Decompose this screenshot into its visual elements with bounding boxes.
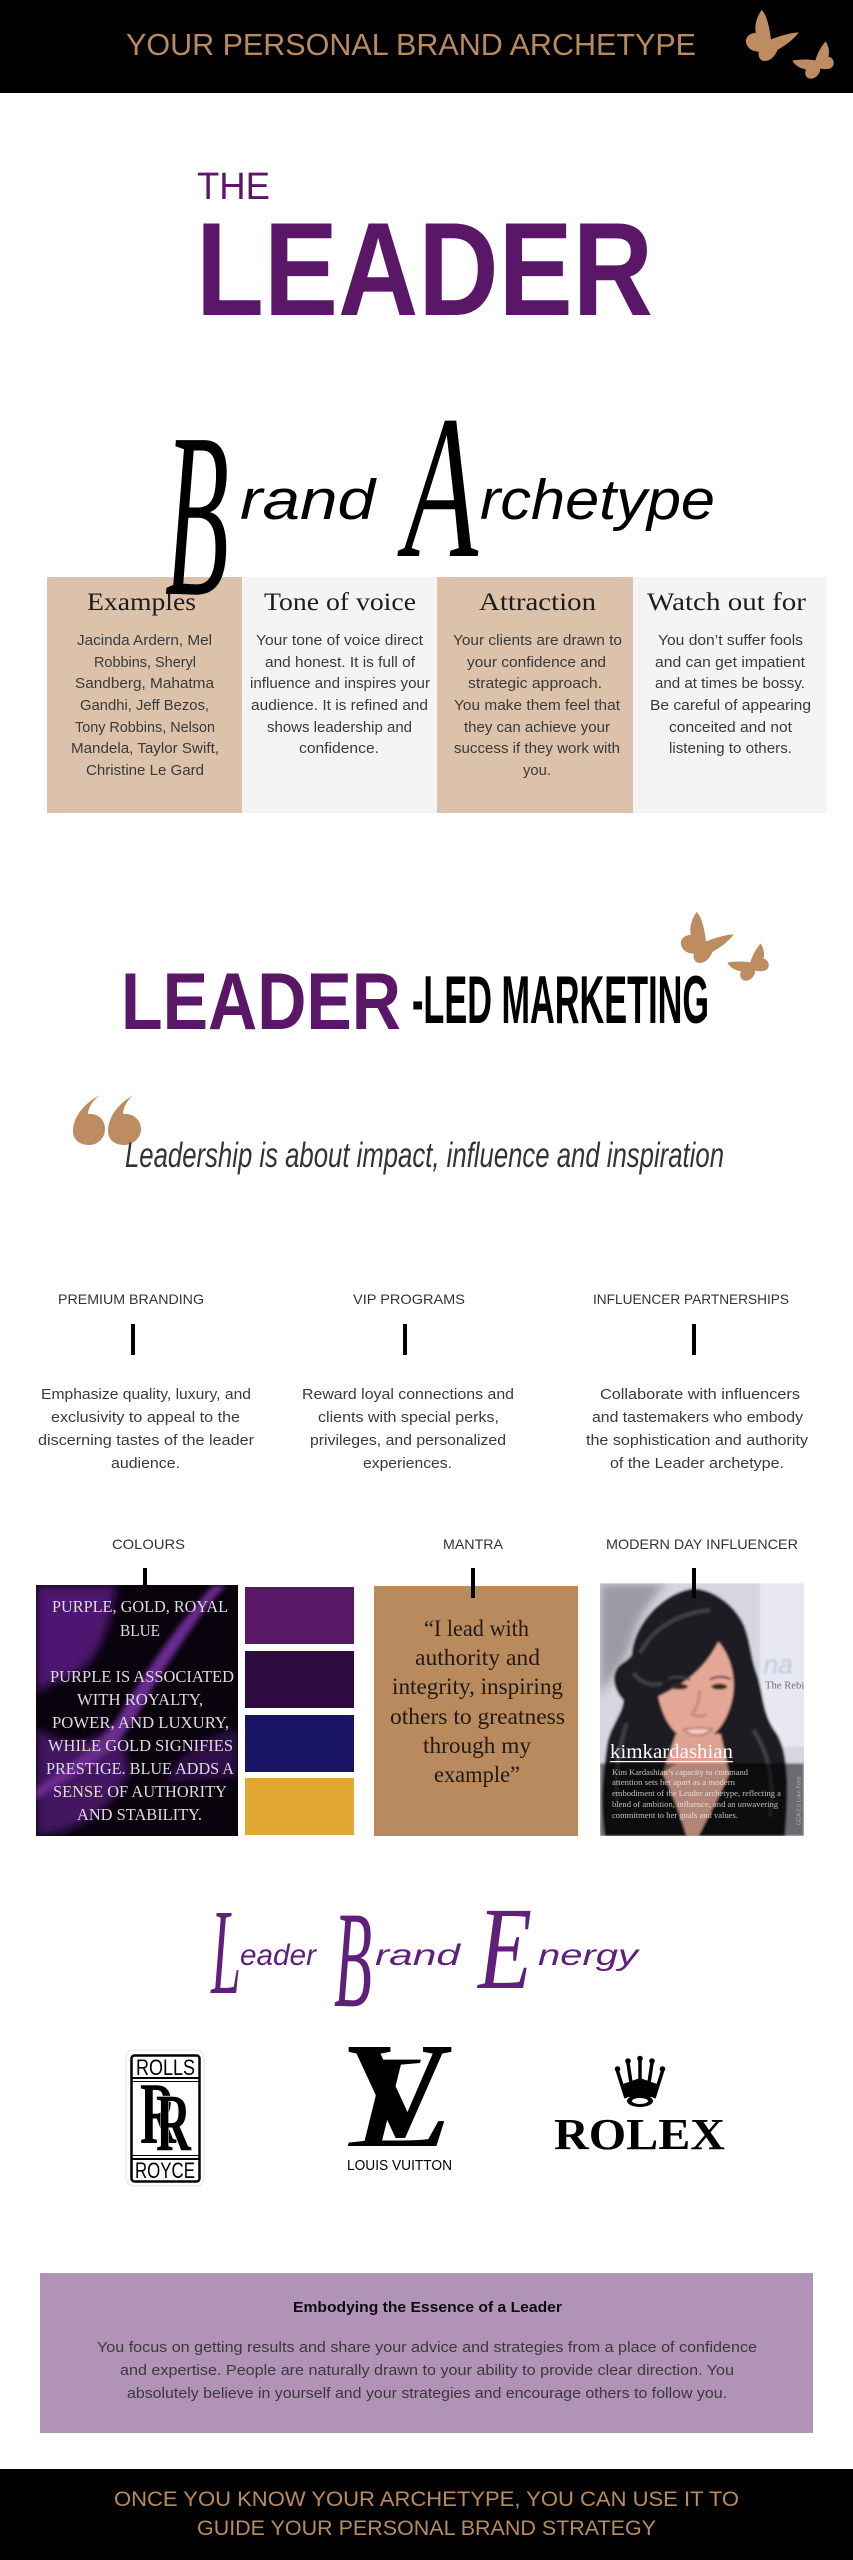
column: watch out for: listening to others. — [669, 741, 792, 757]
script heading: Brand Archetype: A — [397, 374, 478, 601]
column: VIP programs — [302, 1291, 514, 1472]
panel: colours description: PRESTIGE. BLUE ADDS A — [46, 1759, 235, 1778]
column: premium branding: PREMIUM BRANDING — [58, 1291, 204, 1307]
icon: crown — [615, 2056, 665, 2107]
panel: colours description: WHILE GOLD SIGNIFIES — [48, 1736, 233, 1755]
title: The Leader: THE — [197, 166, 270, 208]
panel: mantra: through my — [423, 1733, 531, 1758]
column: examples: Gandhi, Jeff Bezos, — [80, 698, 209, 714]
label: colours: COLOURS — [112, 1536, 185, 1552]
script heading: Brand Archetype: rand — [240, 468, 378, 532]
column: examples — [71, 589, 219, 779]
script heading: Leader Brand Energy: nergy — [538, 1938, 641, 1972]
panel: influencer portrait: commitment to her goals and values. — [612, 1810, 738, 1820]
panel: mantra — [374, 1568, 578, 1836]
column: premium branding: discerning tastes of the leader — [38, 1433, 254, 1449]
panel: mantra: authority and — [415, 1645, 541, 1670]
panel: influencer portrait: The Rebi — [765, 1680, 804, 1691]
logo: Louis Vuitton: V — [347, 2016, 453, 2166]
column: examples: Robbins, Sheryl — [94, 655, 196, 671]
footer band: ONCE YOU KNOW YOUR ARCHETYPE, YOU CAN USE IT TO — [114, 2488, 739, 2511]
colour swatches — [245, 1587, 354, 1835]
script heading: Brand Archetype — [165, 374, 715, 645]
panel: essence of a leader — [40, 2273, 813, 2433]
script heading: Leader Brand Energy: rand — [375, 1938, 462, 1972]
script heading: Brand Archetype: B — [165, 385, 229, 645]
icon: butterflies — [746, 10, 834, 79]
panel: mantra: example” — [434, 1762, 520, 1787]
column: watch out for: Watch out for — [647, 589, 807, 616]
column: influencer partnerships: the sophistication and authority — [586, 1433, 809, 1449]
logo: Rolls Royce — [126, 2050, 204, 2186]
column: influencer partnerships: Collaborate with influencers — [600, 1387, 800, 1403]
column: premium branding — [38, 1291, 254, 1472]
panel: mantra: “I lead with — [424, 1616, 529, 1641]
column: watch out for: and at times be bossy. — [655, 676, 805, 692]
header band — [0, 0, 853, 93]
logo: Rolex — [554, 2056, 725, 2159]
column: influencer partnerships: INFLUENCER PARTNERSHIPS — [593, 1291, 789, 1307]
heading: Leader-led marketing: LEADER — [121, 957, 401, 1047]
panel: colours description: PURPLE, GOLD, ROYAL — [52, 1597, 228, 1616]
panel: influencer portrait — [597, 1568, 807, 1839]
column: tone of voice: Your tone of voice direct — [256, 633, 423, 649]
icon: butterflies — [681, 912, 769, 981]
column: examples: Tony Robbins, Nelson — [75, 720, 215, 736]
column: VIP programs: privileges, and personalized — [310, 1433, 506, 1449]
column: tone of voice: audience. It is refined and — [251, 698, 428, 714]
footer band — [0, 2469, 853, 2560]
panel: influencer portrait: embodiment of the Leader archetype, reflecting a — [612, 1788, 781, 1798]
panel: influencer portrait: blend of ambition, influence, and an unwavering — [612, 1799, 779, 1809]
column: examples: Sandberg, Mahatma — [75, 676, 215, 692]
icon: quotation marks — [73, 1095, 141, 1145]
panel: essence of a leader: absolutely believe in yourself and your strategies and encourage others to follow you. — [127, 2386, 727, 2402]
column: VIP programs: VIP PROGRAMS — [353, 1291, 465, 1307]
panel: colours description: PURPLE IS ASSOCIATED — [50, 1667, 234, 1686]
logo: Rolls Royce: R — [140, 2066, 177, 2163]
column: tone of voice: confidence. — [299, 741, 379, 757]
column: tone of voice — [250, 589, 430, 757]
column: examples: Christine Le Gard — [86, 763, 204, 779]
logo: Louis Vuitton: LOUIS VUITTON — [347, 2157, 452, 2174]
script heading: Leader Brand Energy: B — [334, 1883, 372, 2036]
logo: Rolex: ROLEX — [554, 2110, 725, 2159]
label: mantra: MANTRA — [443, 1536, 504, 1552]
logo: Rolls Royce: R — [156, 2077, 191, 2168]
script heading: Leader Brand Energy: eader — [240, 1938, 317, 1972]
column: examples: Jacinda Ardern, Mel — [77, 633, 212, 649]
footer band: GUIDE YOUR PERSONAL BRAND STRATEGY — [197, 2517, 656, 2540]
column: attraction: they can achieve your — [464, 720, 610, 736]
panel: mantra: integrity, inspiring — [392, 1674, 563, 1699]
column: premium branding: exclusivity to appeal to the — [51, 1410, 240, 1426]
panel: colours description: BLUE — [120, 1621, 160, 1640]
panel: colours description — [36, 1568, 238, 1836]
panel: influencer portrait: Kim Kardashian’s capacity to command — [612, 1767, 749, 1777]
column: VIP programs: Reward loyal connections and — [302, 1387, 514, 1403]
panel: colours description: AND STABILITY. — [77, 1805, 202, 1824]
header title: YOUR PERSONAL BRAND ARCHETYPE — [126, 27, 696, 62]
script heading: Brand Archetype: rchetype — [480, 468, 715, 532]
column: premium branding: Emphasize quality, luxury, and — [41, 1387, 251, 1403]
column: watch out for: Be careful of appearing — [650, 698, 811, 714]
panel: influencer portrait: CCA 2.5 Luke Ford — [797, 1777, 803, 1825]
column: examples: Examples — [87, 589, 196, 616]
column: watch out for: and can get impatient — [655, 655, 805, 671]
column: influencer partnerships: and tastemakers who embody — [592, 1410, 804, 1426]
script heading: Leader Brand Energy: E — [477, 1883, 532, 2014]
logo: Louis Vuitton: L — [347, 2028, 453, 2175]
column: attraction: strategic approach. — [468, 676, 602, 692]
panel: colours description: WITH ROYALTY, — [77, 1690, 203, 1709]
script heading: Leader Brand Energy — [210, 1883, 641, 2036]
column: premium branding: audience. — [111, 1456, 180, 1472]
column: attraction: you. — [523, 763, 551, 779]
panel: essence of a leader: Embodying the Essence of a Leader — [293, 2300, 562, 2316]
column: examples: Mandela, Taylor Swift, — [71, 741, 219, 757]
panel: essence of a leader: and expertise. People are naturally drawn to your ability to provide clear direction. You — [120, 2363, 734, 2379]
column: attraction: You make them feel that — [454, 698, 620, 714]
column: attraction: success if they work with — [454, 741, 620, 757]
panel: mantra: others to greatness — [390, 1704, 565, 1729]
label: modern day influencer: MODERN DAY INFLUENCER — [606, 1536, 798, 1552]
column: tone of voice: Tone of voice — [264, 589, 416, 616]
column: VIP programs: clients with special perks, — [318, 1410, 499, 1426]
column: attraction: Attraction — [479, 589, 597, 616]
column: influencer partnerships: of the Leader archetype. — [610, 1456, 784, 1472]
panel: archetype columns — [47, 577, 827, 813]
column: influencer partnerships — [586, 1291, 809, 1472]
panel: colours description: SENSE OF AUTHORITY — [53, 1782, 227, 1801]
column: watch out for — [647, 589, 811, 757]
column: attraction: your confidence and — [467, 655, 606, 671]
column: attraction: Your clients are drawn to — [453, 633, 622, 649]
column: attraction — [453, 589, 622, 779]
panel: influencer portrait: kimkardashian — [610, 1741, 733, 1763]
panel: colours description: POWER, AND LUXURY, — [52, 1713, 229, 1732]
heading: Leader-led marketing — [121, 957, 709, 1047]
column: tone of voice: shows leadership and — [267, 720, 412, 736]
script heading: Leader Brand Energy: L — [210, 1885, 241, 2020]
panel: influencer portrait: attention sets her apart as a modern — [612, 1777, 736, 1787]
logo: Rolls Royce: ROYCE — [135, 2158, 195, 2183]
column: tone of voice: influence and inspires your — [250, 676, 430, 692]
quote: leadership: Leadership is about impact, influence and inspiration — [125, 1137, 724, 1175]
panel: essence of a leader: You focus on getting results and share your advice and strategies from a place of confidence — [97, 2340, 757, 2356]
column: watch out for: conceited and not — [669, 720, 792, 736]
logo: Rolls Royce: ROLLS — [136, 2055, 195, 2080]
panel: influencer portrait: na — [763, 1649, 793, 1679]
column: VIP programs: experiences. — [363, 1456, 452, 1472]
column: tone of voice: and honest. It is full of — [265, 655, 416, 671]
column: watch out for: You don’t suffer fools — [658, 633, 803, 649]
title: The Leader: LEADER — [196, 196, 653, 344]
